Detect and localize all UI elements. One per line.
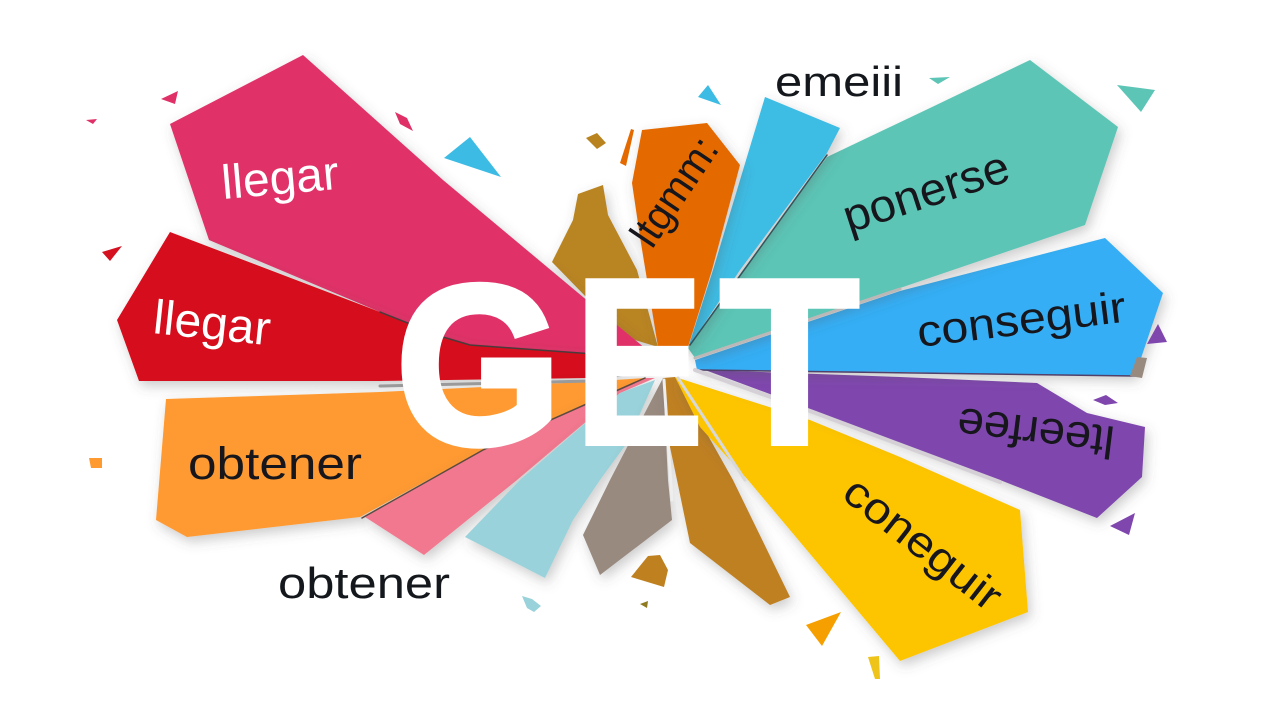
- shard: dark orange: [620, 123, 740, 347]
- shard: cyan: [688, 97, 840, 348]
- title: GET: E: [574, 230, 704, 495]
- label: conseguir on blue: conseguir: [914, 283, 1129, 357]
- shard: light pink: [365, 378, 655, 555]
- shard: teal ponerse: [688, 60, 1118, 358]
- label: obtener below: obtener: [278, 559, 450, 608]
- label: emeiii: emeiii: [775, 58, 903, 105]
- title: GET: [396, 229, 860, 495]
- title: GET: G: [396, 239, 561, 491]
- label: llegar red: llegar: [151, 291, 273, 356]
- label: rotated text on dark orange: ltgmm:: [620, 128, 728, 255]
- shard: grey brown: [583, 378, 672, 575]
- shard: pink llegar: [170, 55, 657, 358]
- label: llegar pink: llegar: [219, 147, 341, 210]
- cracks: [362, 155, 1135, 518]
- label: ponerse on teal: ponerse: [836, 140, 1016, 243]
- shard: purple: [705, 370, 1145, 518]
- confetti fragments: [86, 77, 1167, 679]
- radial shards: [117, 55, 1163, 661]
- shard: red llegar: [117, 232, 657, 381]
- label: inverted text on purple: lteerfee: [954, 398, 1117, 469]
- label: obtener on orange: obtener: [188, 438, 362, 489]
- shard: blue conseguir: [695, 238, 1163, 376]
- shard: orange obtener: [156, 378, 645, 537]
- label: coneguir on yellow: coneguir: [834, 467, 1012, 621]
- shard: gold: [552, 185, 658, 347]
- title: GET: T: [719, 229, 860, 495]
- shard: yellow conseguir: [675, 377, 1028, 661]
- shard: brown: [663, 377, 790, 605]
- shard: light teal: [465, 380, 655, 578]
